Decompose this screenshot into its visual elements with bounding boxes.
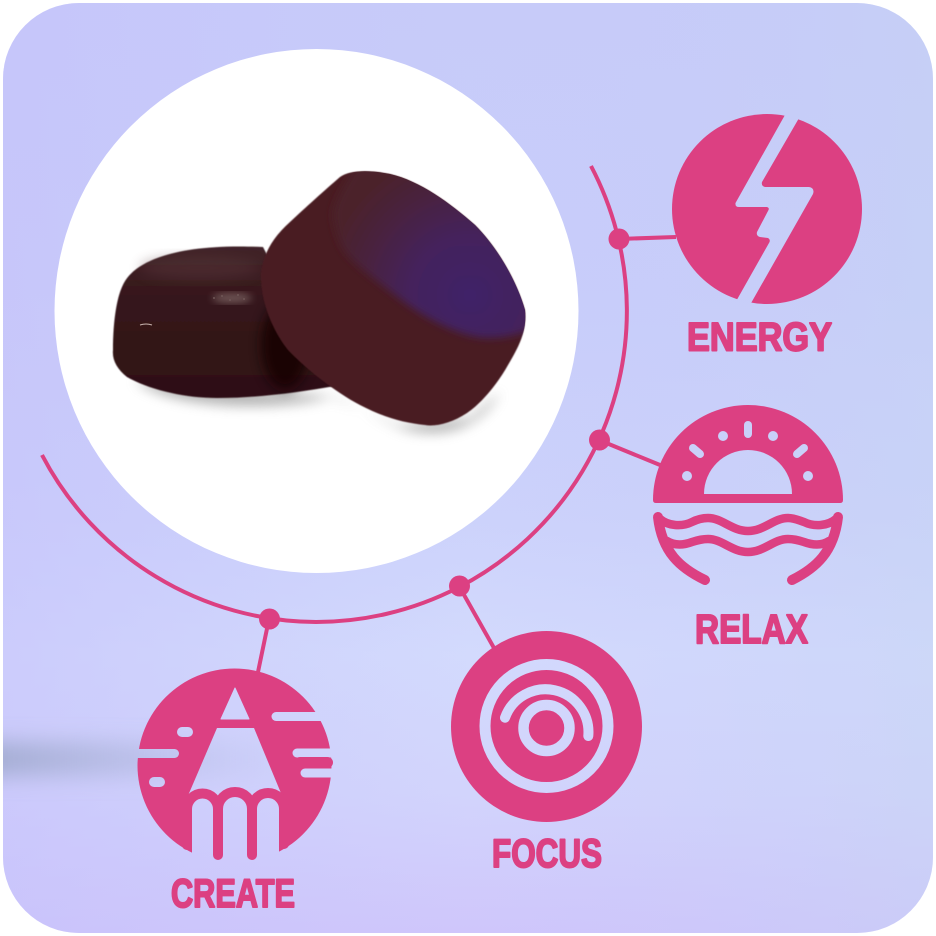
white product circle — [54, 49, 578, 573]
glossy speckle — [212, 293, 252, 303]
connector: relax — [589, 430, 660, 465]
bar tip — [300, 757, 328, 768]
right gummy — [261, 166, 535, 426]
label: energy: ENERGY — [687, 316, 832, 360]
connector: create — [258, 608, 280, 672]
timeline arc — [42, 166, 627, 622]
pencil disc — [138, 668, 332, 862]
left gummy — [113, 246, 335, 398]
connector: focus — [449, 576, 494, 648]
gummy shadow — [135, 380, 500, 433]
icon: create pencil — [138, 668, 332, 862]
label: focus: FOCUS — [492, 832, 602, 876]
icon: focus target — [451, 631, 642, 822]
label: relax: RELAX — [695, 606, 808, 652]
waves — [658, 517, 838, 580]
connector: energy — [608, 228, 676, 250]
pencil scallops and legs — [187, 792, 284, 855]
icon: energy lightning bolt — [672, 114, 862, 304]
icon: relax sunset over waves — [653, 405, 843, 580]
product photo: two gummies — [113, 166, 535, 433]
label: create: CREATE — [171, 872, 295, 916]
sun dome — [653, 405, 843, 503]
